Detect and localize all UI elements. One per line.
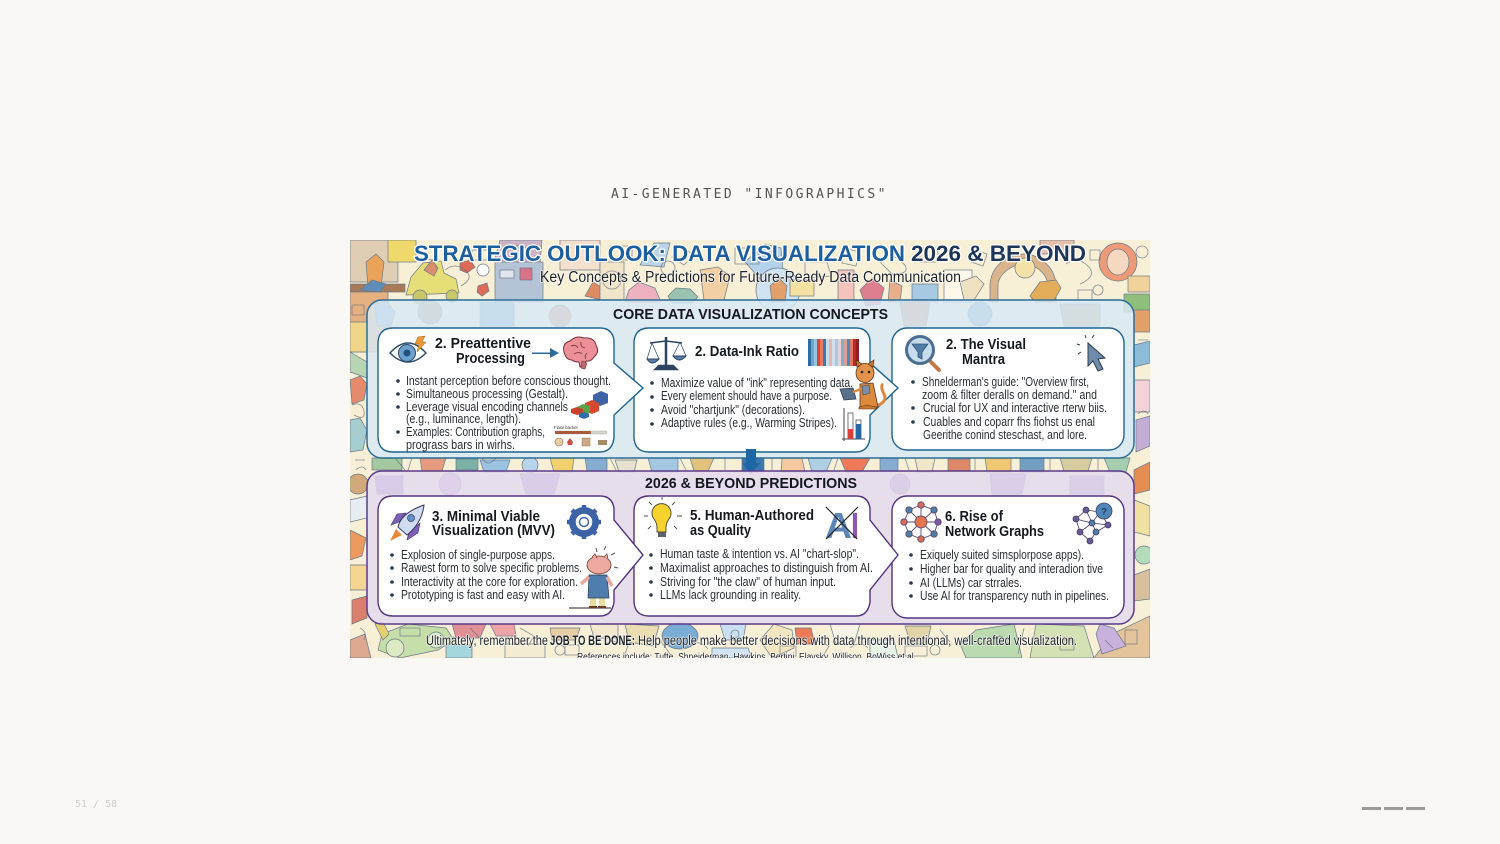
card title: Visualization (MVV): [432, 523, 555, 539]
card: rise of network graphs: [892, 496, 1124, 618]
icon: crossed-out AI: I: [851, 505, 859, 546]
panel: core data visualization concepts: [367, 300, 1134, 458]
bullet list: LLMs lack grounding in reality.: [660, 587, 801, 602]
bullet list: Adaptive rules (e.g., Warming Stripes).: [661, 415, 837, 430]
bullet list: [911, 374, 1107, 442]
page number: 51 / 58: [75, 799, 117, 810]
bullet list: [909, 547, 1109, 603]
icon: 3D blocks: [571, 391, 608, 419]
card title: [435, 336, 531, 367]
closing statement: JOB TO BE DONE:: [550, 633, 635, 648]
card title: 2. Preattentive: [435, 336, 531, 352]
card title: Mantra: [962, 352, 1006, 368]
bullet list: Maximalist approaches to distinguish from AI.: [660, 560, 873, 575]
icon: warming stripes: [808, 339, 859, 366]
bullet list: prograss bars in wirhs.: [406, 437, 515, 452]
card title: as Quality: [690, 523, 751, 539]
icon: magnifier with funnel: [906, 336, 939, 370]
arrow: core to predictions: [742, 449, 760, 474]
bullet list: Avoid "chartjunk" (decorations).: [661, 402, 805, 417]
panel: 2026 and beyond predictions: [367, 471, 1134, 624]
card title: [690, 508, 814, 539]
bullet list: Every element should have a purpose.: [661, 388, 832, 403]
heading: predictions: 2026 & BEYOND PREDICTIONS: [645, 475, 857, 492]
bullet list: Cuables and coparr fhs fiohst us enal: [923, 414, 1095, 429]
icon: progress bar thumbnail: Fiase backer: [554, 425, 578, 430]
bullet list: [649, 546, 873, 602]
bullet list: Geerithe conind steschast, and lore.: [923, 427, 1087, 442]
bullet list: Shnelderman's guide: "Overview first,: [922, 374, 1089, 389]
icon: rocket: [390, 505, 424, 541]
icon: progress bar thumbnail: [554, 425, 607, 446]
icon: balance scale: [647, 337, 686, 369]
card: human-authored as quality: [634, 496, 898, 616]
icon: lightbulb: [644, 497, 682, 537]
bullet list: Striving for "the claw" of human input.: [660, 574, 836, 589]
bullet list: Simultaneous processing (Gestalt).: [406, 386, 568, 401]
card title: 3. Minimal Viable: [432, 509, 540, 525]
slide heading: AI-GENERATED "INFOGRAPHICS": [611, 187, 888, 202]
card title: Processing: [456, 351, 525, 367]
subtitle: Key Concepts & Predictions for Future-Ready Data Communication: [540, 269, 961, 286]
arrow to brain: [532, 348, 559, 358]
card title: 5. Human-Authored: [690, 508, 814, 524]
bullet list: Interactivity at the core for exploration.: [401, 574, 578, 589]
card title: 2. Data-Ink Ratio: [695, 344, 799, 360]
title: 2026 & BEYOND: [911, 241, 1086, 266]
closing statement: Ultimately, remember the: [426, 633, 548, 648]
progress indicator: [1362, 807, 1425, 810]
bullet list: Instant perception before conscious thought.: [406, 373, 611, 388]
title: STRATEGIC OUTLOOK: DATA VISUALIZATION: [414, 241, 905, 266]
card title: 2. The Visual: [946, 337, 1026, 353]
icon: network with question mark: [1073, 503, 1112, 544]
card title: [945, 509, 1044, 540]
bullet list: Higher bar for quality and interadion tive: [920, 561, 1103, 576]
card title: Network Graphs: [945, 524, 1044, 540]
bullet list: Exiquely suited simsplorpose apps).: [920, 547, 1084, 562]
card: the visual mantra: [892, 328, 1124, 450]
bullet list: [396, 373, 611, 452]
bullet list: Examples: Contribution graphs,: [406, 424, 545, 439]
card title: [946, 337, 1026, 368]
bullet list: [390, 547, 582, 602]
bullet list: zoom & filter deralls on demand." and: [922, 387, 1097, 402]
icon: eye with lightning: [390, 336, 426, 362]
icon: cursor click: [1077, 335, 1105, 371]
bullet list: (e.g., luminance, length).: [406, 411, 521, 426]
heading: core concepts: CORE DATA VISUALIZATION CONCEPTS: [613, 306, 888, 323]
bullet list: AI (LLMs) car strrales.: [920, 575, 1022, 590]
card title: 6. Rise of: [945, 509, 1003, 525]
card: data-ink ratio: [634, 328, 898, 452]
bullet list: Human taste & intention vs. AI "chart-slop".: [660, 546, 859, 561]
card: preattentive processing: [378, 328, 643, 452]
card title: [432, 509, 555, 539]
bullet list: Explosion of single-purpose apps.: [401, 547, 555, 562]
icon: small bar chart: [842, 408, 865, 441]
card: minimal viable visualization: [378, 496, 643, 616]
icon: brain: [564, 337, 598, 369]
bullet list: Rawest form to solve specific problems.: [401, 560, 582, 575]
doodle background: [348, 240, 1153, 658]
icon: network graph: [901, 502, 941, 542]
icon: crossed-out AI: A: [825, 505, 852, 546]
bullet list: Prototyping is fast and easy with AI.: [401, 587, 565, 602]
icon: cartoon pig: [569, 546, 618, 608]
infographic: [350, 240, 1150, 658]
icon: network with question mark: ?: [1101, 507, 1107, 518]
icon: gear: [567, 505, 601, 539]
bullet list: Crucial for UX and interactive rterw biis.: [923, 400, 1107, 415]
icon: cartoon cat with tablet: [840, 360, 885, 409]
bullet list: Maximize value of "ink" representing data.: [661, 375, 853, 390]
bullet list: Use AI for transparency nuth in pipelines.: [920, 588, 1109, 603]
closing statement: [426, 633, 1077, 648]
bullet list: Leverage visual encoding channels: [406, 399, 568, 414]
bullet list: [650, 375, 853, 430]
